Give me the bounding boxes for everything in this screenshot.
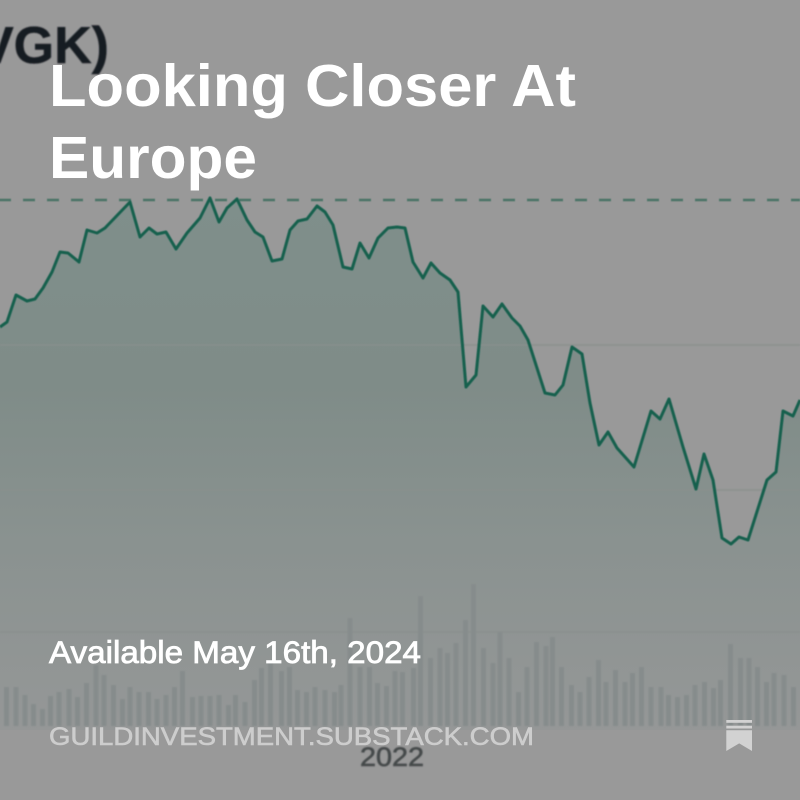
icon: substack bookmark xyxy=(726,720,752,751)
chart: dashed resistance line xyxy=(0,199,800,201)
chart: area under price line xyxy=(0,198,800,730)
title: Europe xyxy=(49,125,257,191)
title xyxy=(49,53,576,191)
chart: volume bars xyxy=(4,584,796,726)
publication URL: GUILDINVESTMENT.SUBSTACK.COM xyxy=(49,723,534,751)
availability date: Available May 16th, 2024 xyxy=(49,634,421,670)
chart axis label: 2022 xyxy=(360,742,424,772)
chart: price line xyxy=(0,198,800,544)
title: Looking Closer At xyxy=(49,53,576,119)
